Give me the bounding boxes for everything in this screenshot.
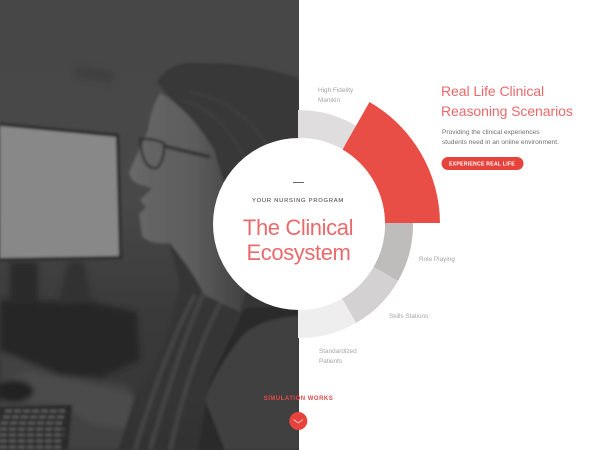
computer monitor bbox=[0, 123, 122, 261]
glasses bbox=[140, 139, 210, 168]
callout text: students need in an online environment. bbox=[442, 139, 559, 146]
diagram: clinical ecosystem ring bbox=[298, 102, 440, 338]
short dash bbox=[293, 182, 304, 183]
callout button bbox=[442, 157, 524, 170]
segment: real life scenarios bbox=[342, 102, 440, 223]
hair bbox=[118, 63, 299, 450]
label: high fidelity manikin: High Fidelity bbox=[318, 87, 354, 94]
title: Ecosystem bbox=[247, 240, 350, 265]
callout text: Providing the clinical experiences bbox=[442, 129, 540, 136]
footer label: SIMULATION WORKS bbox=[264, 396, 333, 402]
segment: role playing bbox=[374, 222, 413, 281]
label: high fidelity manikin: Manikin bbox=[318, 97, 340, 104]
keyboard bbox=[0, 405, 72, 450]
callout button: EXPERIENCE REAL LIFE bbox=[449, 162, 515, 168]
hair strands bbox=[135, 290, 222, 450]
label: standardized patients: Patients bbox=[319, 358, 342, 365]
segment: standardized patients bbox=[298, 298, 356, 338]
photo: woman at a computer bbox=[0, 0, 299, 450]
label: skills stations: Skills Stations bbox=[389, 313, 428, 320]
shoulder bbox=[205, 316, 299, 450]
segment: high fidelity manikin bbox=[298, 110, 358, 149]
callout heading: Reasoning Scenarios bbox=[441, 103, 573, 119]
label: role playing: Role Playing bbox=[419, 256, 455, 263]
face bbox=[129, 93, 250, 312]
lower desk surface bbox=[0, 352, 135, 450]
arm and hand bbox=[24, 376, 134, 424]
wall vent bbox=[82, 71, 108, 78]
callout heading: Real Life Clinical bbox=[441, 83, 544, 99]
segment: skills stations bbox=[342, 267, 398, 323]
center circle bbox=[213, 138, 385, 310]
label: standardized patients: Standardized bbox=[319, 348, 357, 355]
eyebrow text: YOUR NURSING PROGRAM bbox=[252, 198, 344, 204]
desk and equipment bbox=[0, 300, 140, 378]
icon: scroll down button bbox=[289, 412, 307, 430]
dark top bbox=[198, 305, 299, 450]
title: The Clinical bbox=[243, 215, 353, 240]
